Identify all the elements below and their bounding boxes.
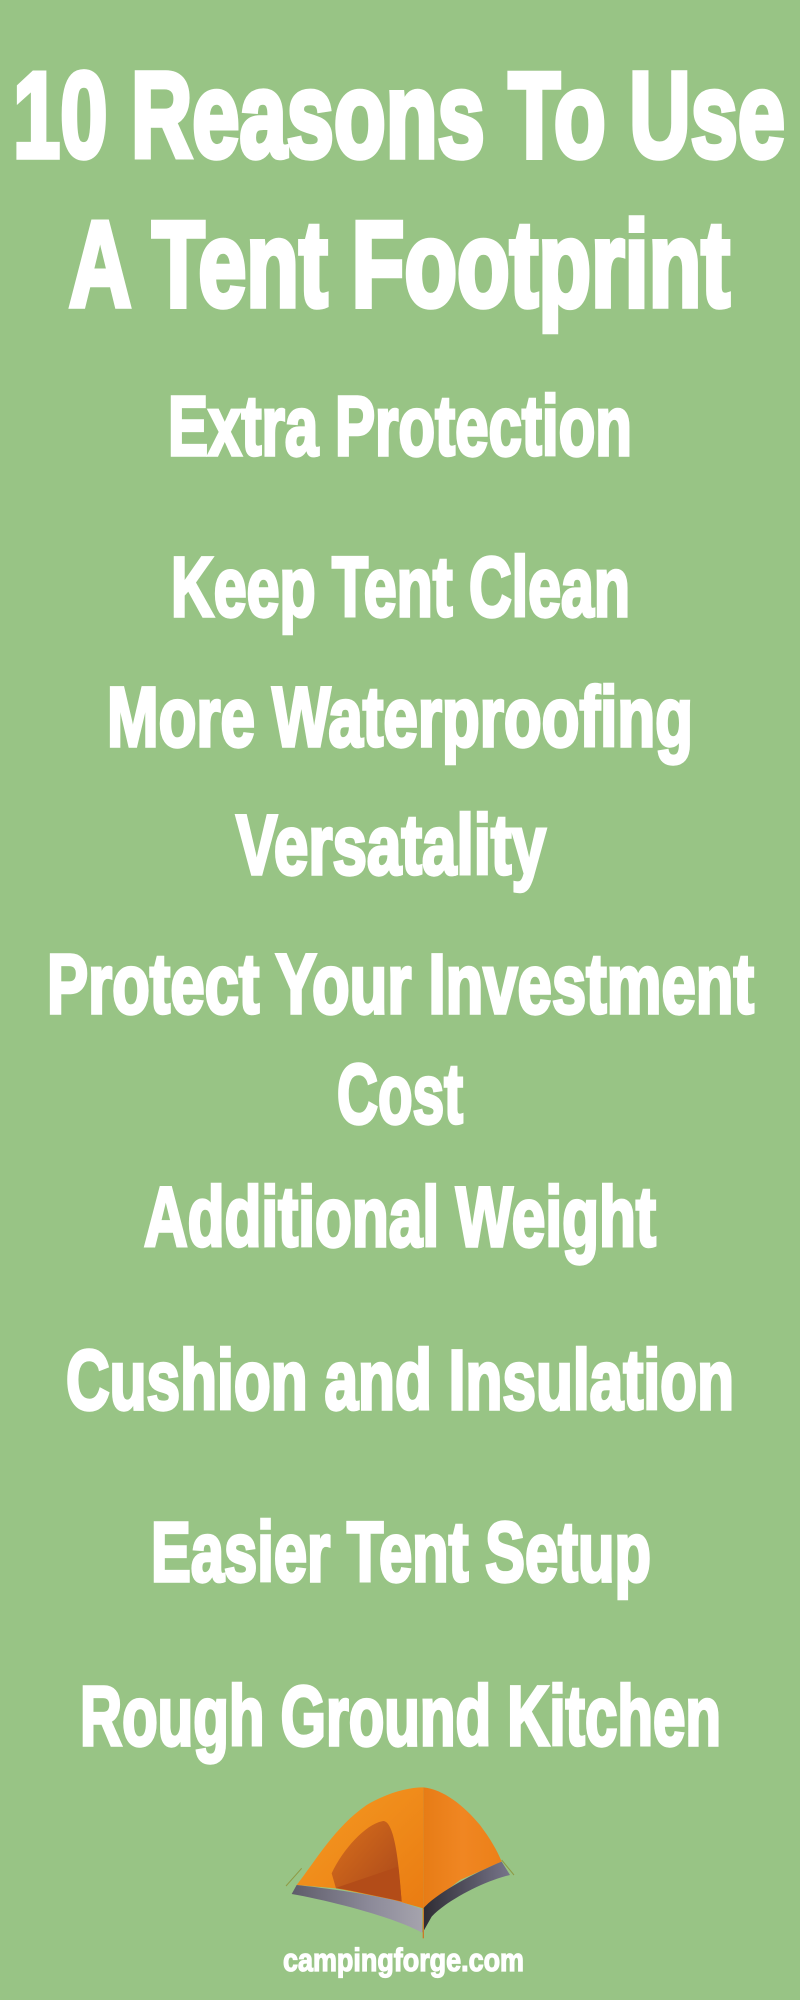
reason: Versatality: Versatality — [236, 798, 546, 892]
website: campingforge.com: campingforge.com — [283, 1942, 524, 1978]
icon: orange dome tent — [286, 1787, 514, 1938]
reason: Extra Protection: Extra Protection — [168, 379, 632, 473]
reason: Cost: Cost — [337, 1047, 463, 1141]
title — [13, 47, 785, 332]
